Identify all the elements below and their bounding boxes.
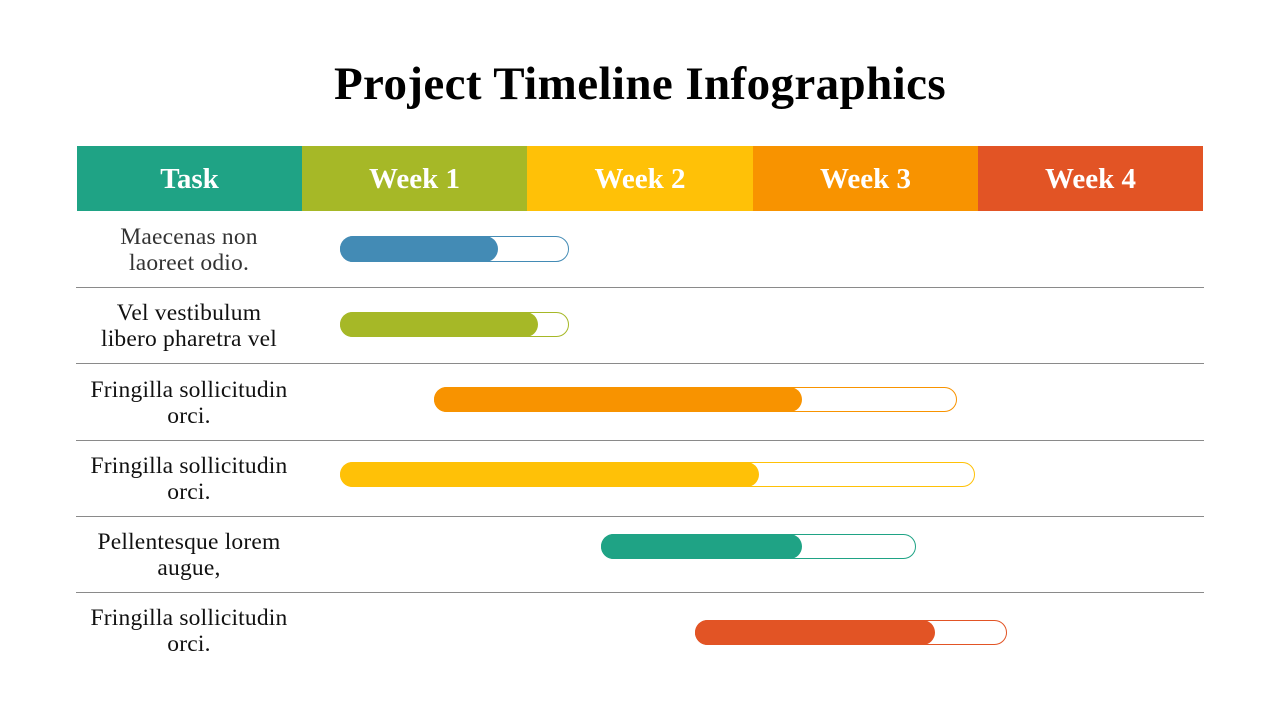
task label: row 5: Pellentesque lorem [97, 529, 281, 555]
table header [77, 146, 1203, 211]
task label: row 3: orci. [167, 403, 211, 429]
progress bar: row 2 [340, 312, 569, 337]
task label: row 3 [91, 377, 287, 429]
task label: row 5 [97, 529, 281, 581]
task label: row 6: orci. [167, 631, 211, 657]
progress bar: row 1 [340, 236, 569, 262]
task label: row 4: orci. [167, 479, 211, 505]
progress bar: row 3 [434, 387, 957, 412]
task label: row 2: libero pharetra vel [101, 326, 277, 352]
header: week 4 [978, 146, 1203, 211]
task label: row 1: Maecenas non [120, 224, 258, 250]
header: week 2: Week 2 [594, 163, 686, 195]
title: Project Timeline Infographics [334, 58, 946, 110]
progress bar: row 6 [695, 620, 1007, 645]
task label: row 5: augue, [157, 555, 221, 581]
header: week 3 [753, 146, 978, 211]
task label: row 2: Vel vestibulum [117, 300, 261, 326]
progress bar: row 5 [601, 534, 916, 559]
progress bar: row 4 [340, 462, 975, 487]
header: week 1: Week 1 [369, 163, 460, 195]
task label: row 1: laoreet odio. [129, 250, 249, 276]
task label: row 6: Fringilla sollicitudin [91, 605, 287, 631]
header: week 3: Week 3 [820, 163, 911, 195]
task label: row 2 [101, 300, 277, 352]
header: week 2 [527, 146, 753, 211]
header: week 4: Week 4 [1045, 163, 1136, 195]
task label: row 3: Fringilla sollicitudin [91, 377, 287, 403]
task label: row 4 [91, 453, 287, 505]
task label: row 6 [91, 605, 287, 657]
header: task [77, 146, 302, 211]
header: task: Task [160, 163, 219, 195]
task label: row 4: Fringilla sollicitudin [91, 453, 287, 479]
task label: row 1 [120, 224, 258, 276]
header: week 1 [302, 146, 527, 211]
